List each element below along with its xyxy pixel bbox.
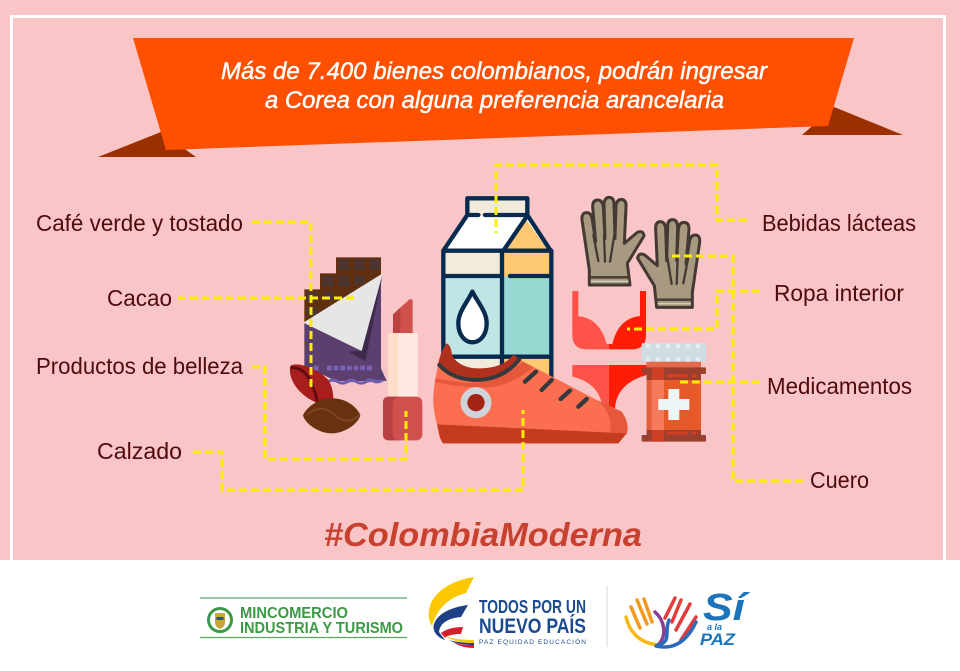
- label: Café verde y tostado: Café verde y tostado: [36, 210, 243, 236]
- illustration: coffee beans: [290, 364, 360, 433]
- ribbon left tail: [98, 132, 196, 157]
- base: [383, 397, 422, 440]
- bullet: [393, 299, 413, 333]
- title text: a Corea con alguna preferencia arancelaria: [265, 87, 724, 114]
- label: Calzado: [97, 410, 523, 490]
- wrapper fold shadow: [348, 275, 383, 361]
- footer band: [0, 560, 960, 671]
- illustration: underwear: [572, 291, 647, 408]
- emblem: [208, 608, 232, 632]
- title text: Más de 7.400 bienes colombianos, podrán ingresar: [221, 58, 768, 85]
- carton outlines: [443, 198, 551, 380]
- flag swoosh: [429, 577, 474, 648]
- upper: [433, 343, 628, 443]
- label: Ropa interior: Ropa interior: [774, 280, 904, 306]
- label: Productos de belleza: [36, 353, 406, 459]
- sole: [437, 424, 627, 443]
- illustration: sneaker: [433, 343, 628, 443]
- milk drop: [458, 292, 487, 342]
- carton roof: [443, 215, 550, 251]
- chocolate: [304, 257, 381, 323]
- wrapper seal: [314, 366, 372, 370]
- white frame: [12, 16, 944, 560]
- label bands: [642, 367, 706, 374]
- illustration: lipstick: [383, 299, 422, 440]
- logo: Todos por un nuevo país: [429, 577, 586, 648]
- wrapper: [304, 277, 387, 381]
- illustration: leather gloves: [582, 197, 700, 307]
- briefs: [572, 365, 609, 408]
- label: Bebidas lácteas: Bebidas lácteas: [762, 210, 916, 236]
- title ribbon: [98, 38, 903, 157]
- bra: [572, 291, 609, 349]
- logo: Sí a la paz: a la: [707, 622, 722, 632]
- bottle cap: [642, 343, 706, 362]
- ribbon band: [133, 38, 854, 150]
- label: Cuero: Cuero: [810, 467, 869, 493]
- ribbon right tail: [802, 107, 903, 135]
- logo: Sí a la paz: [626, 587, 750, 649]
- right glove: [638, 220, 700, 307]
- red bean: [290, 364, 333, 407]
- logo: Mincomercio: INDUSTRIA Y TURISMO: [240, 620, 403, 637]
- logo: Todos por un nuevo país: NUEVO PAÍS: [479, 615, 586, 638]
- illustration: milk carton: [443, 198, 552, 398]
- bottle body: [647, 362, 701, 438]
- eyelet: [460, 387, 491, 418]
- logo: Todos por un nuevo país: TODOS POR UN: [479, 596, 586, 617]
- left glove: [582, 197, 644, 285]
- label: Cuero: [669, 256, 869, 493]
- laces: [525, 372, 587, 407]
- cross: [658, 389, 689, 420]
- toe cap: [597, 400, 628, 434]
- tube: [388, 333, 418, 398]
- label: Café verde y tostado: [36, 210, 311, 390]
- label: Productos de belleza: Productos de belleza: [36, 353, 243, 379]
- label: Ropa interior: [627, 280, 904, 329]
- logo: Mincomercio: [200, 598, 407, 638]
- label: Medicamentos: Medicamentos: [767, 373, 912, 399]
- hashtag: #ColombiaModerna: [324, 516, 642, 553]
- logo: Sí a la paz: PAZ: [700, 630, 736, 649]
- illustration: medicine bottle: [642, 343, 706, 442]
- label: Cacao: Cacao: [107, 285, 172, 311]
- carton panels: [443, 252, 552, 398]
- label: Calzado: Calzado: [97, 438, 182, 464]
- illustration: chocolate bar: [303, 257, 387, 385]
- logo: Mincomercio: MINCOMERCIO: [240, 605, 348, 622]
- logo: Sí a la paz: Sí: [703, 587, 750, 629]
- collar lining: [438, 343, 519, 380]
- label: Bebidas lácteas: [496, 165, 916, 236]
- hands: [626, 598, 696, 647]
- logo: Todos por un nuevo país: PAZ EQUIDAD EDUCACIÓN: [479, 637, 586, 646]
- foil: [303, 273, 383, 351]
- divider: [606, 586, 608, 647]
- brown bean: [303, 398, 360, 433]
